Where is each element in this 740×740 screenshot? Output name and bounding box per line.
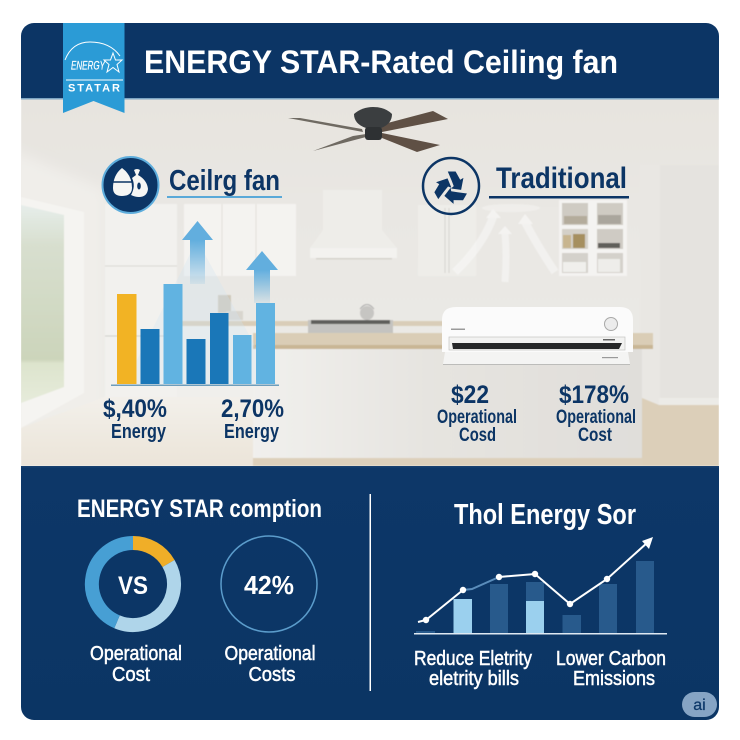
- left section: consumption: [77, 495, 322, 686]
- island: [252, 332, 654, 466]
- back counter and stove: [182, 294, 442, 334]
- energy star ribbon badge: STATAR: [68, 82, 120, 94]
- right cabinet and shelves: [444, 200, 627, 276]
- energy star ribbon badge: [63, 23, 124, 113]
- icon: recycle: [423, 158, 479, 214]
- stat: $22: $22: [451, 381, 489, 409]
- icon: drops: [102, 157, 158, 213]
- label: lower carbon: [556, 648, 666, 690]
- label: reduce bills: Reduce Eletrity: [414, 648, 532, 670]
- header band: [21, 23, 719, 100]
- heading: ceiling fan: [102, 157, 282, 213]
- stat: 70% energy: [222, 399, 284, 442]
- label: reduce bills: [414, 648, 532, 690]
- stat: 40% energy: [103, 398, 166, 442]
- stat: $178%: Operational: [556, 407, 636, 428]
- bars and trend line chart: [414, 537, 667, 634]
- label: operational costs: Operational: [224, 643, 316, 665]
- stat: 70% energy: Energy: [224, 421, 280, 443]
- stats: ceiling fan: [103, 395, 284, 443]
- left cabinets: [105, 204, 296, 362]
- label: operational costs: Costs: [248, 664, 296, 686]
- right section: energy savings: [414, 499, 667, 690]
- stat: 40% energy: Energy: [111, 421, 167, 443]
- kitchen photo background: [11, 99, 719, 466]
- white airflow arrows: [455, 204, 555, 282]
- label: Ceilrg fan: [169, 165, 280, 197]
- ai badge: [682, 692, 717, 717]
- heading: traditional: [423, 158, 629, 214]
- ring with 42 percent: 42%: [244, 570, 294, 600]
- bottom panel: [21, 466, 719, 720]
- stat: $22: [438, 384, 516, 441]
- section title: Thol Energy Sor: [454, 499, 636, 531]
- label: lower carbon: Lower Carbon: [556, 648, 666, 670]
- donut chart: VS: [118, 572, 148, 600]
- stat: 70% energy: 2,70%: [221, 395, 284, 423]
- donut chart: [92, 543, 174, 625]
- label: operational costs: [225, 644, 315, 682]
- title: ENERGY STAR-Rated Ceiling fan: [144, 44, 618, 80]
- ring with 42 percent: [221, 536, 317, 632]
- ai badge: ai: [693, 697, 706, 714]
- section title: ENERGY STAR comption: [77, 495, 322, 523]
- stat: $178%: [556, 384, 635, 441]
- ceiling fan: [288, 107, 448, 152]
- air conditioner: [442, 307, 633, 364]
- stat: $178%: Cost: [578, 425, 613, 446]
- window: [21, 206, 64, 402]
- up arrow: large: [182, 221, 213, 284]
- stats: traditional: [438, 384, 635, 441]
- stat: $22: Cosd: [459, 425, 496, 446]
- label: reduce bills: eletrity bills: [429, 668, 519, 690]
- label: operational cost: Operational: [90, 643, 182, 665]
- stat: $22: Operational: [437, 407, 517, 428]
- stat: 40% energy: $,40%: [103, 395, 167, 423]
- stat: $178%: $178%: [559, 381, 629, 409]
- label: lower carbon: Emissions: [573, 668, 655, 690]
- label: operational cost: [90, 644, 181, 682]
- bar chart: ceiling fan: [111, 284, 279, 386]
- range hood: [310, 248, 396, 260]
- light blue airflow shading: [136, 254, 276, 384]
- energy star ribbon badge: ENERGY: [71, 58, 106, 72]
- up arrow: small: [246, 251, 278, 303]
- label: operational cost: Cost: [112, 664, 150, 686]
- label: Traditional: [496, 162, 627, 195]
